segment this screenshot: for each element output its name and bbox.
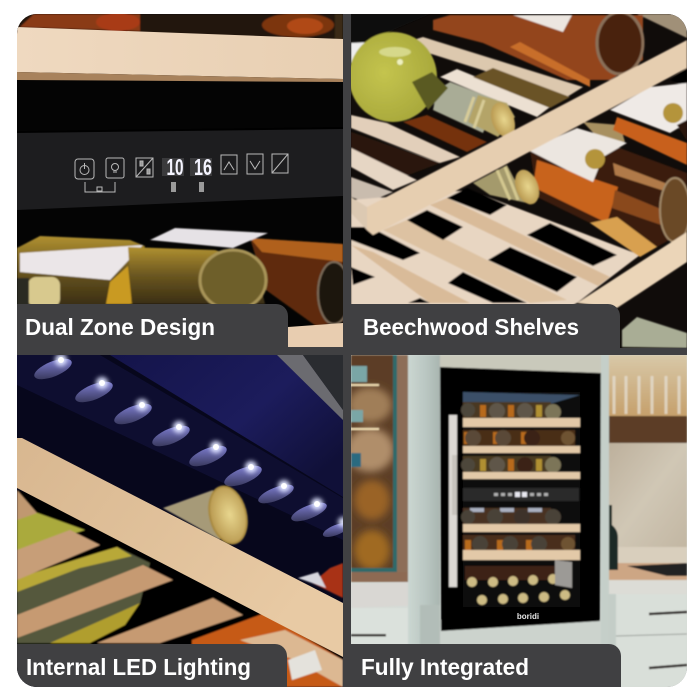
white marble counter — [351, 582, 428, 608]
white counter right — [609, 580, 687, 594]
wine bottle on counter — [609, 505, 618, 570]
temperature display 10: 10 — [166, 154, 184, 180]
wooden slats — [17, 530, 100, 580]
right beech rail — [577, 232, 687, 308]
panel: beechwood shelves photo — [349, 12, 690, 348]
lower slat grid — [351, 188, 640, 312]
wooden countertop — [609, 563, 687, 581]
bottle cap behind front bottle — [583, 122, 625, 142]
upper slats — [400, 14, 687, 117]
induction hob — [627, 563, 687, 576]
beech shelves inside cooler — [463, 418, 580, 560]
top row of bottles — [17, 13, 343, 40]
panel: fully integrated kitchen photo — [346, 355, 687, 687]
upper right white-label bottle — [610, 68, 687, 165]
temperature display ghost segments — [162, 158, 212, 176]
dark wood shelf — [609, 416, 687, 443]
cooler door — [440, 367, 601, 631]
icon: down button — [247, 154, 263, 174]
LED lights row — [32, 354, 351, 540]
right cabinets — [609, 594, 687, 687]
label: fully integrated — [351, 644, 621, 687]
lower right bottle — [622, 317, 687, 348]
lower dark area — [17, 490, 343, 687]
display lights — [494, 492, 548, 497]
navy upper panel — [110, 355, 343, 497]
icon: up button — [221, 155, 237, 174]
right pale column — [601, 355, 609, 645]
glass display shelves left — [346, 355, 397, 572]
icon: zone select button — [136, 158, 153, 177]
panel: LED lighting photo — [17, 354, 351, 687]
rose bottle top right — [433, 12, 643, 87]
cooler control strip — [463, 488, 579, 501]
label: beechwood shelves: Beechwood Shelves — [363, 314, 579, 340]
mosaic splashback — [609, 443, 687, 564]
temperature display 16: 16 — [194, 154, 212, 180]
zone indicators — [171, 182, 204, 192]
left cabinet — [351, 608, 420, 687]
icon: power button — [75, 159, 94, 179]
control panel strip — [17, 128, 343, 210]
gold bottle cap — [163, 483, 252, 547]
wine glasses backdrop — [609, 355, 687, 417]
lower bottles — [17, 228, 350, 326]
brown wall strip — [397, 355, 408, 582]
icon: temperature unit button — [272, 154, 288, 173]
icon: light button — [106, 158, 124, 178]
label: beechwood shelves — [351, 304, 620, 354]
label: internal LED lighting: Internal LED Lighting — [26, 654, 251, 680]
panel: dual zone photo — [17, 13, 350, 347]
pale tall panel — [408, 355, 440, 645]
main beech rail — [367, 40, 687, 235]
bottom panel below cooler — [440, 620, 601, 650]
label: dual zone design — [17, 304, 288, 354]
beech shelf front — [17, 27, 343, 82]
label: dual zone design: Dual Zone Design — [25, 314, 215, 340]
bottle rows — [461, 402, 575, 552]
bottom zone bottles — [465, 566, 570, 605]
brand logo: boridi — [517, 612, 539, 621]
icon: lock bracket — [85, 182, 115, 192]
barcode sticker — [288, 650, 322, 680]
shelf corner bottom right — [288, 323, 343, 347]
beech beam — [17, 438, 343, 657]
front rose bottle with gold seal — [528, 128, 690, 257]
label: fully integrated: Fully Integrated — [361, 654, 529, 680]
gray door strip — [277, 355, 343, 420]
orange bottle and red bottle — [192, 613, 343, 687]
cooler window — [461, 392, 580, 607]
cap of lower bottle — [473, 165, 543, 208]
rail shadow top left — [351, 30, 392, 44]
label: internal LED lighting — [17, 644, 287, 687]
green bottle — [349, 32, 519, 141]
LED rail band — [17, 355, 343, 540]
spec label — [555, 560, 572, 588]
top panel above cooler — [440, 355, 601, 373]
green bottle behind slats — [17, 512, 150, 643]
cooler door handle — [449, 415, 457, 587]
lower left slats and amber bottle — [351, 115, 487, 203]
